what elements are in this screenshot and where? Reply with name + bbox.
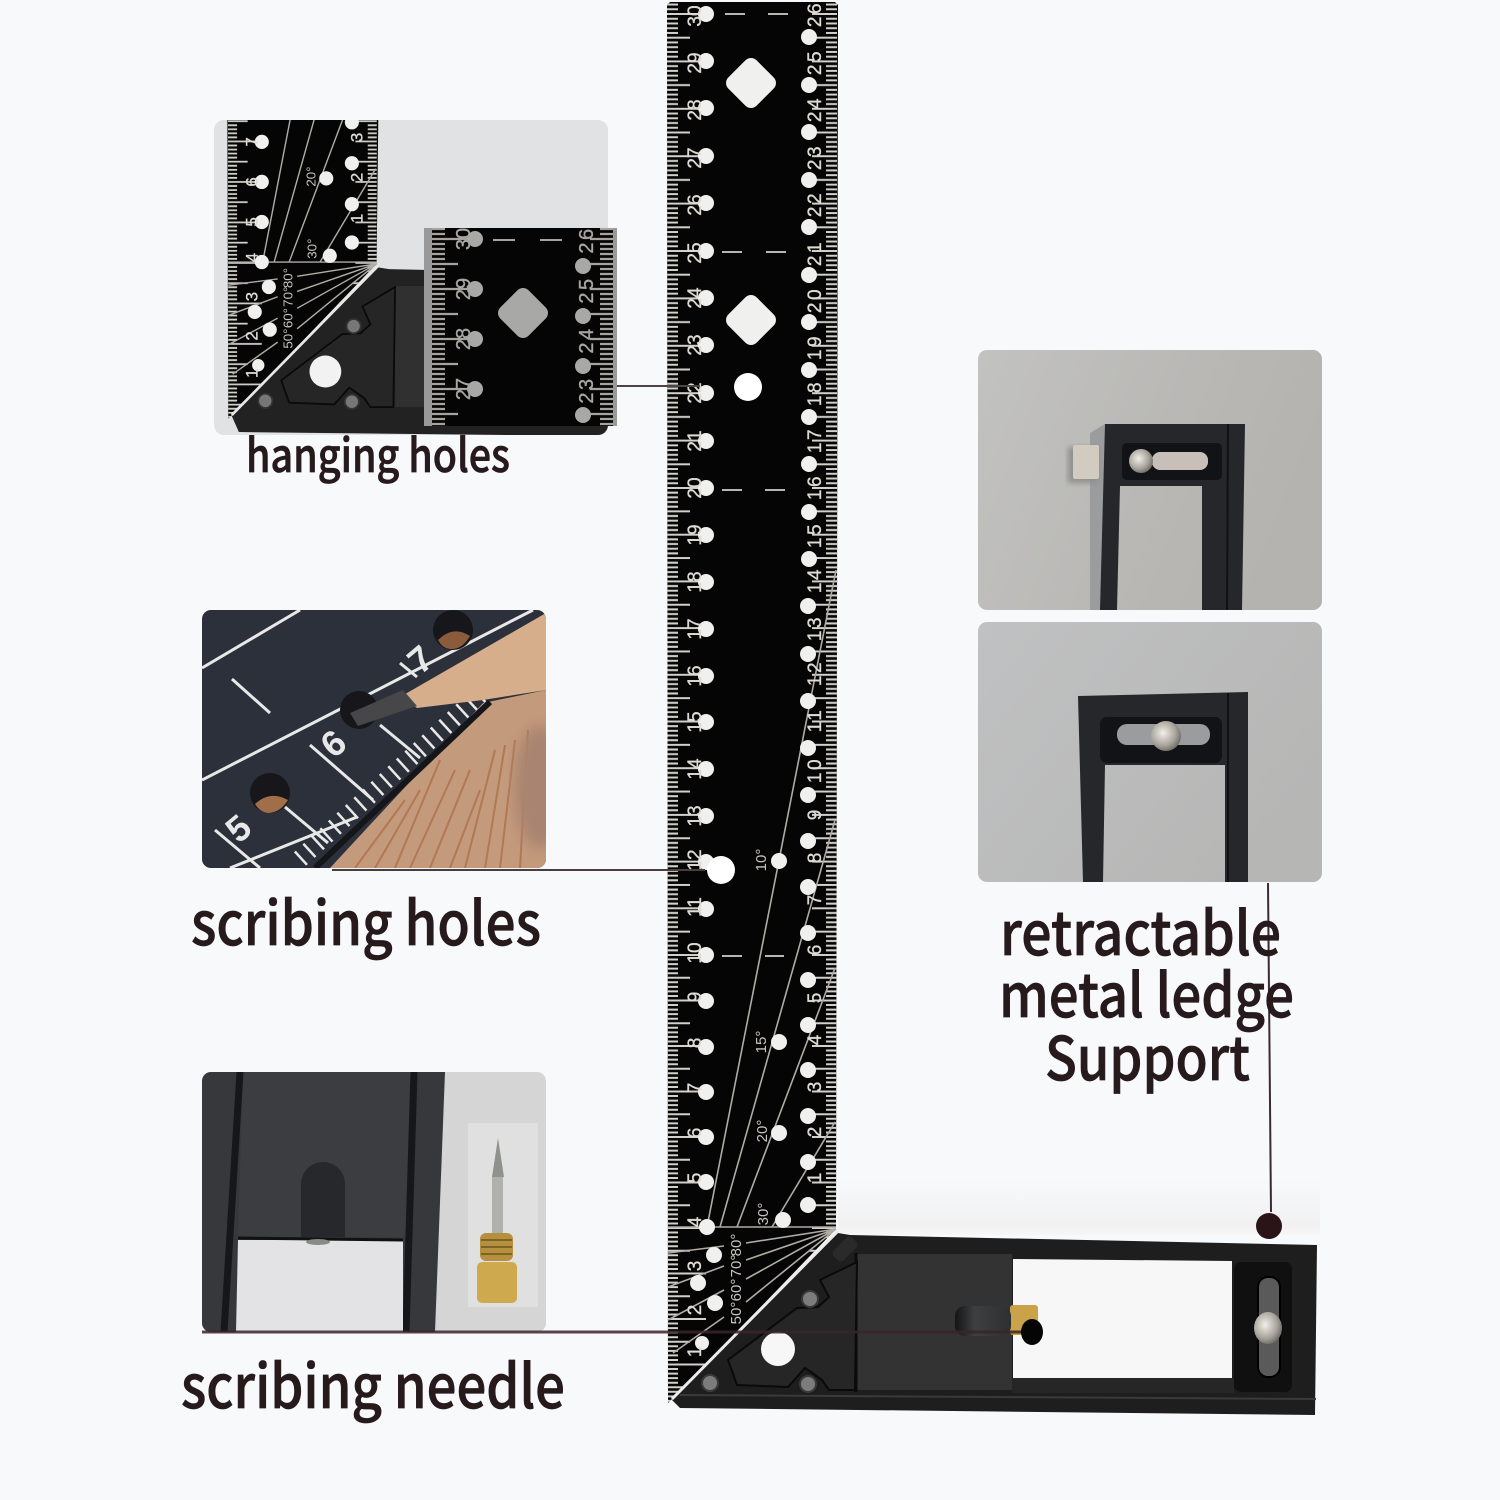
ruler blade (666, 2, 838, 1405)
right scale numbers: 18 (805, 380, 826, 406)
inset: ruler corner view: 60° (281, 308, 296, 328)
left scale numbers: 25 (685, 242, 706, 264)
inset: ruler top section with hanging hole (424, 226, 617, 426)
left scale numbers: 11 (685, 897, 706, 917)
right scale numbers: 15 (805, 522, 826, 548)
inset: ruler corner view: 6 (242, 177, 261, 187)
left scale numbers: 5 (685, 1173, 706, 1183)
callout line: scribing holes (332, 869, 705, 871)
angle degree labels: 70° (728, 1255, 745, 1277)
slider plate (238, 1072, 412, 1237)
black frame (1100, 424, 1245, 610)
right scale numbers: 7 (805, 895, 826, 905)
right scale numbers: 25 (805, 49, 826, 75)
label: scribing needle: scribing needle (181, 1339, 565, 1426)
left scale numbers: 15 (685, 711, 706, 733)
right scale numbers: 21 (805, 240, 826, 266)
scribing hole openings (250, 610, 473, 813)
left scale numbers: 24 (685, 287, 706, 309)
inset: ruler corner view: 7 (242, 137, 261, 147)
left scale numbers: 1 (685, 1347, 706, 1357)
inset: ruler corner view: 20° (304, 167, 319, 187)
inset: ruler corner view: 1 (348, 214, 366, 223)
inset: ruler top section with hanging hole: 24 (576, 326, 598, 354)
left scale numbers: 17 (685, 618, 706, 640)
label: retractable metal ledge support (999, 886, 1294, 1098)
label: retractable metal ledge support: Support (1045, 1011, 1250, 1098)
ruler markings on plate (202, 610, 533, 868)
inset: ruler top section with hanging hole: 23 (576, 376, 598, 404)
label: retractable metal ledge support: retractable (1000, 886, 1281, 973)
left scale numbers: 28 (685, 99, 706, 121)
large hanging hole (734, 373, 762, 401)
metal ledge block (1068, 445, 1099, 483)
spare needle (468, 1123, 538, 1307)
left scale numbers: 26 (685, 194, 706, 216)
right scale numbers: 10 (805, 757, 826, 783)
finger (510, 723, 546, 851)
callout line: metal ledge (1268, 883, 1271, 1212)
angle holes (690, 853, 791, 1350)
handle mounting hole (761, 1332, 795, 1366)
left scale numbers: 12 (685, 849, 706, 871)
inset: ruler top section with hanging hole: 27 (453, 378, 475, 400)
black frame (1078, 692, 1248, 882)
left scale numbers (685, 5, 706, 1357)
panel: ledge extended photo (978, 622, 1322, 882)
ruler markings on plate: 5 (217, 806, 259, 851)
ruler markings on plate: 6 (312, 721, 354, 766)
left scale numbers: 21 (685, 430, 706, 452)
left scale numbers: 6 (685, 1128, 706, 1138)
left scale numbers: 18 (685, 571, 706, 593)
right scale numbers: 8 (805, 853, 826, 863)
label: scribing holes: scribing holes (191, 876, 541, 963)
right scale numbers: 6 (805, 945, 826, 955)
right scale numbers (805, 1, 826, 1183)
left scale numbers: 9 (685, 992, 706, 1002)
inset: ruler corner view: 5 (242, 217, 261, 227)
angle degree labels: 10° (753, 849, 770, 871)
panel: scribing holes photo (202, 610, 566, 868)
inset: ruler top section with hanging hole: 28 (453, 328, 475, 350)
right scale numbers: 14 (805, 567, 826, 593)
inset: ruler corner view (227, 120, 608, 435)
right scale numbers: 19 (805, 334, 826, 360)
callout line: hanging holes (617, 385, 700, 387)
square base / handle (672, 1233, 1317, 1415)
left scale numbers: 27 (685, 147, 706, 169)
right scale numbers: 23 (805, 144, 826, 170)
angle degree labels: 15° (753, 1031, 770, 1053)
left scale numbers: 22 (685, 382, 706, 404)
right scale numbers: 12 (805, 660, 826, 686)
inset: ruler top section with hanging hole: 26 (576, 226, 598, 254)
panel: hanging holes inset (214, 120, 617, 435)
left scale numbers: 29 (685, 52, 706, 74)
left scale numbers: 2 (685, 1305, 706, 1315)
left scale numbers: 13 (685, 805, 706, 827)
inset: ruler corner view: 30° (305, 239, 320, 259)
pin knob (301, 1162, 345, 1237)
left scale numbers: 7 (685, 1083, 706, 1093)
inset: ruler corner view: 70° (281, 287, 296, 307)
right scale numbers: 13 (805, 615, 826, 641)
left scale numbers: 20 (685, 477, 706, 499)
inset: ruler top section with hanging hole: 30 (453, 228, 475, 250)
left scale numbers: 23 (685, 334, 706, 356)
callout dot: scribing needle (1021, 1319, 1043, 1345)
inset: ruler corner view: 3 (242, 292, 261, 301)
left scale numbers: 14 (685, 758, 706, 780)
inset: ruler top section with hanging hole: 25 (576, 276, 598, 304)
right scale numbers: 5 (805, 993, 826, 1003)
left scale numbers: 3 (685, 1261, 706, 1271)
inset: ruler corner view: 80° (281, 268, 296, 288)
pencil (350, 613, 546, 726)
left scale numbers: 30 (685, 5, 706, 27)
panel: ledge retracted photo (978, 350, 1322, 610)
angle degree labels: 50° (728, 1302, 745, 1324)
main square ruler (666, 1, 1317, 1415)
right scale numbers: 3 (805, 1082, 826, 1092)
right scale numbers: 24 (805, 96, 826, 122)
inset: ruler corner view: 3 (348, 133, 366, 142)
left scale numbers: 19 (685, 524, 706, 546)
left scale numbers: 8 (685, 1038, 706, 1048)
angle degree labels: 80° (728, 1234, 745, 1256)
right scale numbers: 20 (805, 287, 826, 313)
left scale numbers: 16 (685, 665, 706, 687)
angle degree labels: 20° (754, 1120, 771, 1142)
inset: ruler corner view: 1 (242, 369, 261, 378)
scribing pin in handle (1010, 1305, 1038, 1335)
wood surface (315, 690, 546, 868)
angle degree labels: 60° (728, 1279, 745, 1301)
inset: ruler corner view: 50° (281, 328, 296, 349)
right scale numbers: 9 (805, 810, 826, 820)
right scale numbers: 17 (805, 427, 826, 453)
label: hanging holes: hanging holes (246, 420, 510, 486)
right scale numbers: 4 (805, 1034, 826, 1045)
left scale numbers: 4 (685, 1216, 706, 1227)
adjust screw (1254, 1312, 1282, 1344)
angle degree labels: 30° (755, 1203, 772, 1225)
label: retractable metal ledge support: metal ledge (999, 948, 1294, 1035)
right scale numbers: 1 (805, 1173, 826, 1183)
left scale numbers: 10 (685, 942, 706, 964)
inset: ruler top section with hanging hole: 29 (453, 278, 475, 300)
inset: ruler corner view: 4 (242, 253, 261, 262)
right scale numbers: 16 (805, 474, 826, 500)
inset: ruler corner view: 2 (242, 331, 261, 341)
left scribing holes (698, 6, 715, 1235)
angle guide lines (668, 14, 838, 1399)
right scribing holes (800, 29, 817, 1213)
inset: ruler corner view: 2 (348, 173, 366, 182)
ruler lower section (227, 113, 378, 419)
diamond hanging holes (723, 55, 779, 348)
right scale numbers: 11 (805, 708, 826, 732)
callout line: scribing needle (202, 1330, 1030, 1334)
right scale numbers: 22 (805, 191, 826, 217)
angle degree labels (728, 849, 772, 1324)
callout dot: metal ledge (1256, 1213, 1282, 1239)
large scribing hole (707, 856, 735, 884)
right scale numbers: 2 (805, 1127, 826, 1137)
opening below plate (236, 1240, 403, 1332)
right scale numbers: 26 (805, 1, 826, 27)
ruler markings on plate: 7 (399, 637, 441, 682)
panel: scribing needle photo (202, 1072, 546, 1332)
corner base (232, 267, 608, 435)
